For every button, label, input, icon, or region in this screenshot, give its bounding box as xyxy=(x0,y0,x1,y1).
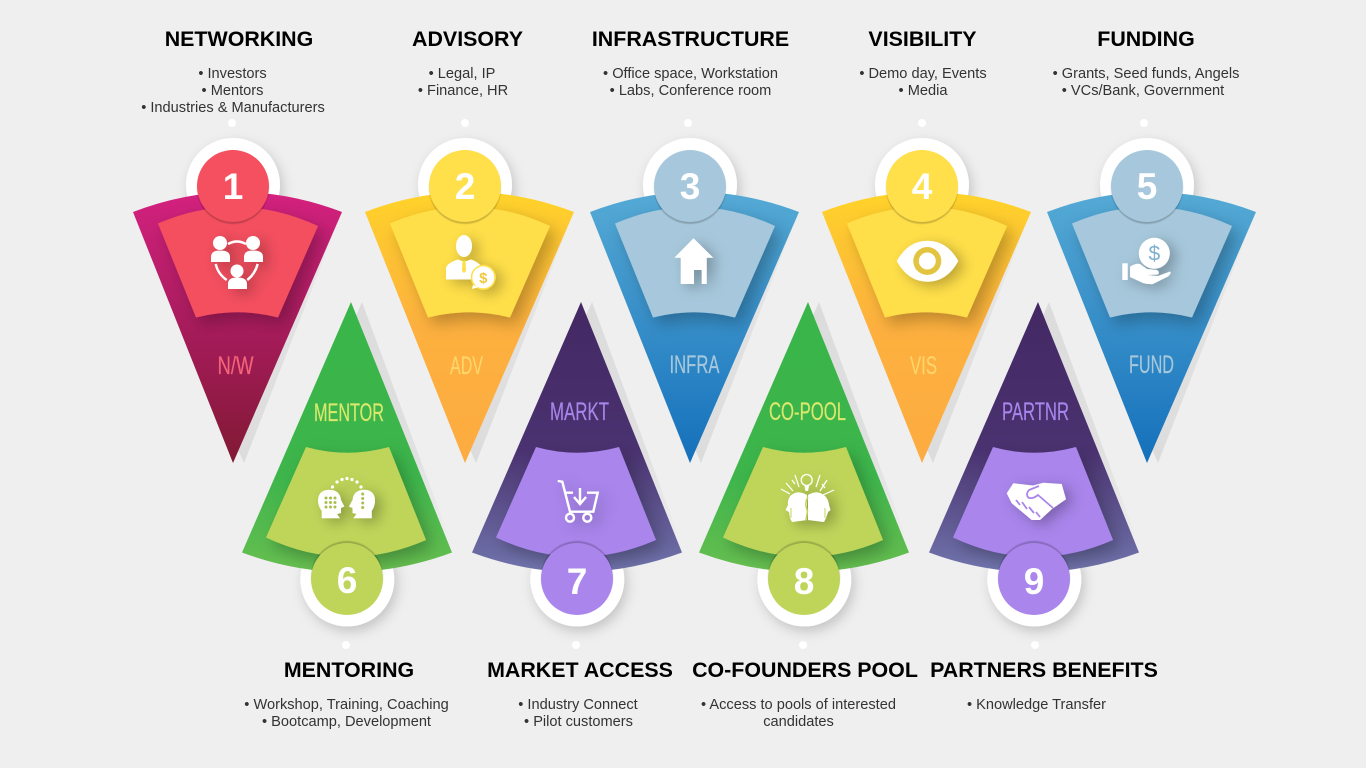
panel: partners benefits text: • Knowledge Transfer xyxy=(967,697,1106,713)
panel: advisory text xyxy=(412,27,523,99)
number 2: 2 xyxy=(455,166,475,207)
icon: two heads sharing knowledge xyxy=(318,477,375,518)
panel: co-founders pool text: CO-FOUNDERS POOL xyxy=(692,658,918,682)
panel: visibility text: • Media xyxy=(899,83,948,99)
label CO-POOL: CO-POOL xyxy=(769,398,846,426)
panel: cone 2 advisory xyxy=(365,119,574,463)
icon: people network xyxy=(211,236,263,289)
panel: funding text xyxy=(1053,27,1239,99)
panel: networking text: NETWORKING xyxy=(165,27,313,51)
number 8: 8 xyxy=(794,561,814,602)
icon: shopping cart xyxy=(558,481,598,522)
panel: cone 4 visibility xyxy=(822,119,1031,463)
panel: cone 3 infrastructure xyxy=(590,119,799,463)
panel: market access text: • Pilot customers xyxy=(524,714,633,730)
icon: heads with light bulb xyxy=(781,474,834,522)
panel: co-founders pool text: • Access to pools of interested xyxy=(701,697,896,713)
panel: networking text: • Industries & Manufacturers xyxy=(141,100,325,116)
label INFRA: INFRA xyxy=(670,351,720,379)
panel: partners benefits text: PARTNERS BENEFITS xyxy=(930,658,1158,682)
number 1: 1 xyxy=(223,166,243,207)
panel: mentoring text: MENTORING xyxy=(284,658,414,682)
number 4: 4 xyxy=(912,166,933,207)
panel: cone 5 funding xyxy=(1047,119,1256,463)
panel: funding text: • VCs/Bank, Government xyxy=(1062,83,1224,99)
panel: cone 7 market access xyxy=(472,302,682,649)
label PARTNR: PARTNR xyxy=(1002,398,1069,426)
icon: advisor with dollar bubble: $ xyxy=(479,270,488,287)
icon: eye xyxy=(897,241,958,282)
icon: house xyxy=(674,238,713,284)
label N/W: N/W xyxy=(218,352,254,380)
icon: hand with coin xyxy=(1122,238,1171,284)
panel: partners benefits text xyxy=(930,658,1158,713)
icon: handshake xyxy=(1007,483,1066,520)
panel: cone 1 networking xyxy=(133,119,342,463)
panel: networking text: • Mentors xyxy=(202,83,263,99)
panel: infrastructure text: • Labs, Conference room xyxy=(610,83,771,99)
panel: market access text: • Industry Connect xyxy=(518,697,638,713)
panel: market access text xyxy=(487,658,673,730)
number 7: 7 xyxy=(567,561,587,602)
panel: mentoring text xyxy=(244,658,449,730)
panel: visibility text: • Demo day, Events xyxy=(859,66,987,82)
number 5: 5 xyxy=(1137,166,1157,207)
label MARKT: MARKT xyxy=(550,398,609,426)
panel: networking text xyxy=(141,27,325,116)
panel: funding text: FUNDING xyxy=(1097,27,1195,51)
icon: advisor with dollar bubble xyxy=(446,235,496,290)
number 6: 6 xyxy=(337,560,357,601)
number 3: 3 xyxy=(680,166,700,207)
panel: visibility text: VISIBILITY xyxy=(868,27,977,51)
icon: hand with coin: $ xyxy=(1148,242,1160,266)
panel: advisory text: • Legal, IP xyxy=(429,66,495,82)
panel: cone 6 mentoring xyxy=(242,302,452,649)
panel: cone 9 partners benefits xyxy=(929,302,1139,649)
panel: visibility text xyxy=(859,27,987,99)
panel: infrastructure text: • Office space, Workstation xyxy=(603,66,778,82)
panel: mentoring text: • Bootcamp, Development xyxy=(262,714,431,730)
panel: mentoring text: • Workshop, Training, Coaching xyxy=(244,697,449,713)
label MENTOR: MENTOR xyxy=(314,399,384,427)
label ADV: ADV xyxy=(450,352,483,380)
label VIS: VIS xyxy=(910,352,937,380)
panel: co-founders pool text xyxy=(692,658,918,730)
panel: infrastructure text xyxy=(592,27,789,99)
panel: advisory text: • Finance, HR xyxy=(418,83,508,99)
panel: funding text: • Grants, Seed funds, Angels xyxy=(1053,66,1239,82)
panel: co-founders pool text: candidates xyxy=(763,714,834,730)
panel: cone 8 co-founders pool xyxy=(699,302,909,649)
panel: networking text: • Investors xyxy=(198,66,267,82)
panel: advisory text: ADVISORY xyxy=(412,27,523,51)
panel: infrastructure text: INFRASTRUCTURE xyxy=(592,27,789,51)
label FUND: FUND xyxy=(1129,351,1174,379)
number 9: 9 xyxy=(1024,561,1044,602)
panel: market access text: MARKET ACCESS xyxy=(487,658,673,682)
